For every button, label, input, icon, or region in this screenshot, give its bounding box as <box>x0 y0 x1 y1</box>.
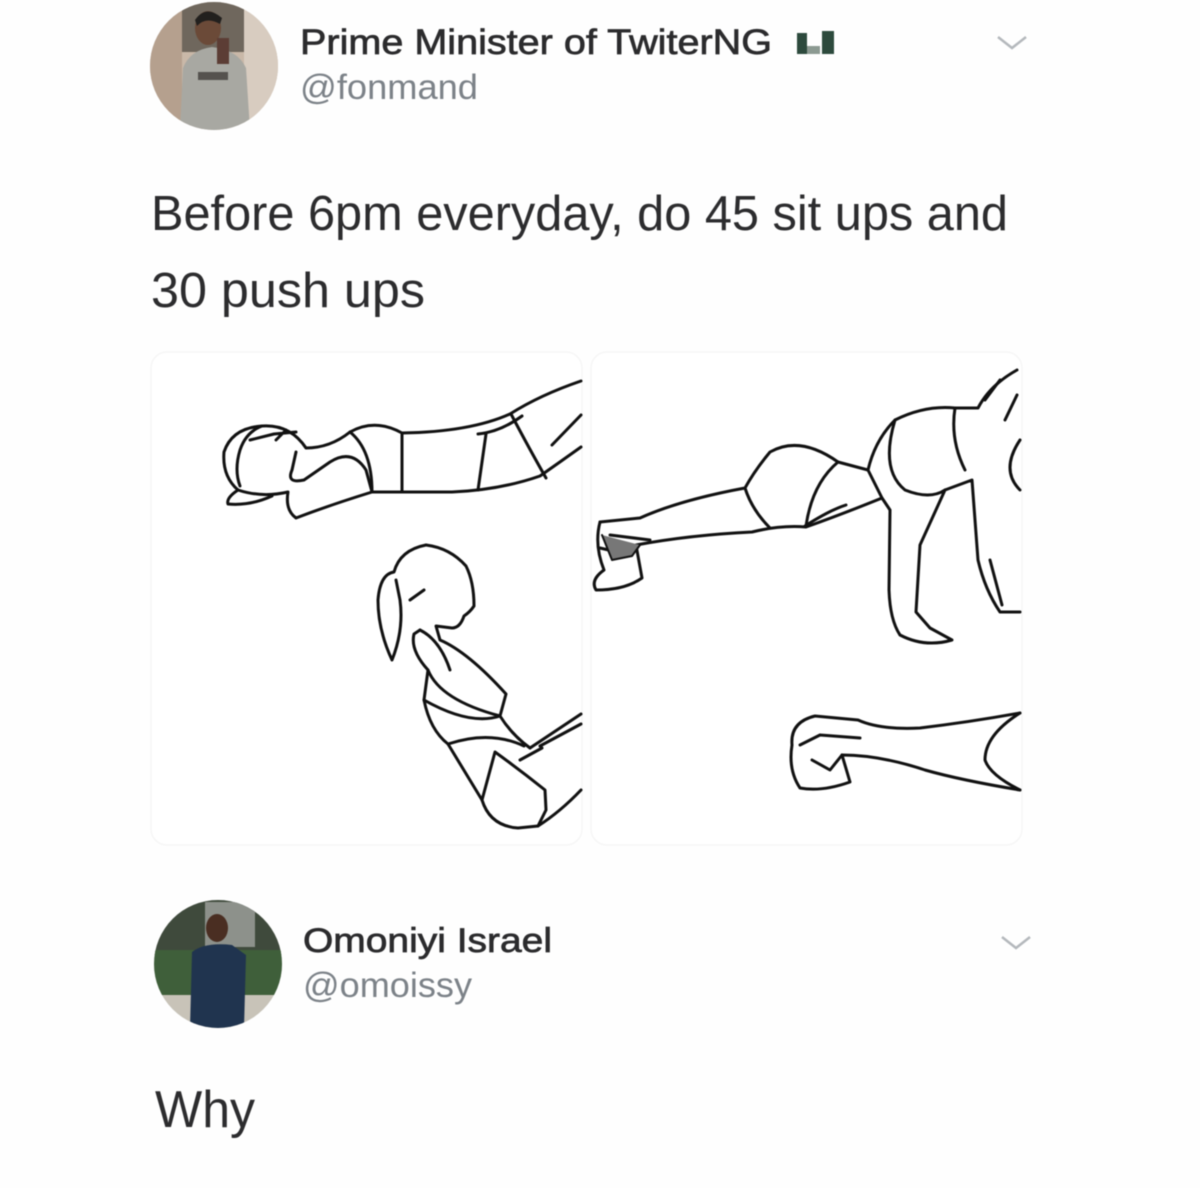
icon: Nigerian flag <box>797 31 834 54</box>
reply handle: @omoissy <box>303 966 473 1005</box>
figure: plank top <box>594 370 1020 643</box>
reply text: Why <box>155 1081 255 1139</box>
figure: plank lower legs <box>791 713 1020 790</box>
tweet text: Before 6pm everyday, do 45 sit ups and <box>151 187 1008 241</box>
author name: Prime Minister of TwiterNG <box>300 23 772 62</box>
figure: sitting up <box>378 545 581 828</box>
figure: lying down <box>224 381 581 518</box>
panel: push ups illustration <box>591 352 1022 845</box>
tweet text: 30 push ups <box>151 264 425 318</box>
panel: sit ups illustration <box>151 352 582 845</box>
avatar: Omoniyi Israel <box>154 900 282 1028</box>
tweet text <box>151 187 1008 318</box>
avatar: Prime Minister of TwiterNG <box>150 2 278 130</box>
author handle: @fonmand <box>300 68 478 107</box>
icon: chevron reply <box>1002 937 1030 948</box>
icon: chevron top <box>998 37 1026 48</box>
reply author name: Omoniyi Israel <box>303 922 552 960</box>
